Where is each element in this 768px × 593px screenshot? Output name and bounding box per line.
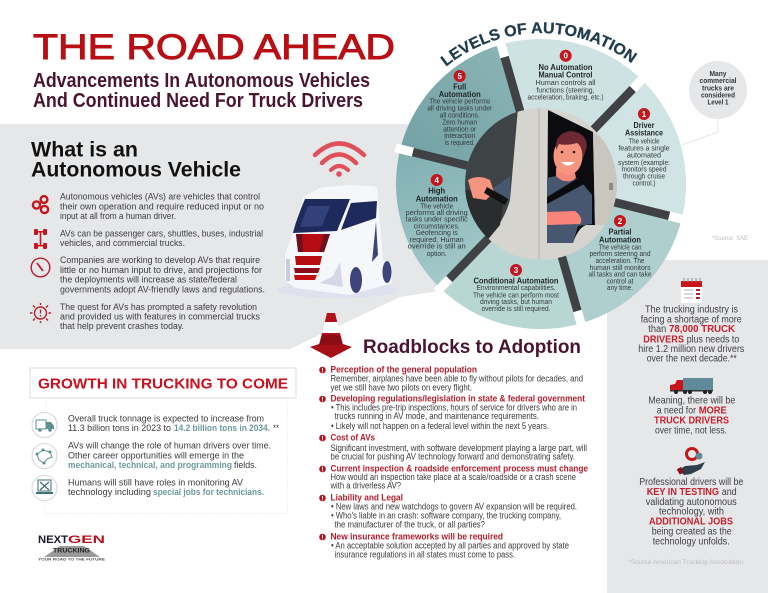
level 0	[528, 50, 604, 102]
text: technician roles: special jobs for technicians.	[153, 487, 264, 497]
text: driver shortage: 78,000 TRUCK	[669, 324, 735, 335]
text: AV development: little or no human input to drive, and projections for	[60, 265, 262, 275]
level 0: acceleration, braking, etc.)	[528, 94, 604, 102]
level 0: functions (steering,	[536, 88, 595, 94]
level 5: is required.	[445, 140, 475, 147]
text: need for more drivers	[648, 396, 736, 437]
level 1: Assistance	[625, 129, 664, 138]
source: American Trucking Association: *Source American Trucking Association	[628, 560, 743, 566]
level 5: attention or	[443, 126, 477, 133]
icon: gears	[33, 196, 48, 213]
level 1: system (example:	[618, 160, 670, 167]
roadblock: liability: the manufacturer of the truck, or all parties?	[334, 519, 485, 529]
level 4: High	[428, 187, 445, 196]
icon: network	[32, 444, 57, 468]
roadblock: insurance	[319, 530, 569, 559]
roadblock: inspection: with a driverless AV?	[330, 481, 401, 491]
logo: NextGen Trucking: TRUCKING	[53, 548, 90, 555]
level 1: control.)	[632, 180, 656, 187]
text: need for more drivers: Meaning, there will be	[648, 396, 736, 407]
heading: levels of automation: LEVELS OF AUTOMATION	[440, 22, 638, 66]
heading: roadblocks to adoption: Roadblocks to Adoption	[363, 337, 581, 358]
roadblock: inspection	[319, 462, 588, 491]
heading: growth in trucking to come: GROWTH IN TRUCKING TO COME	[38, 376, 288, 392]
level 4: override is still an	[408, 244, 466, 251]
level 0: Human controls all	[536, 80, 596, 87]
level 3: The vehicle can perform most	[473, 292, 559, 299]
level 3: Conditional Automation	[474, 276, 559, 285]
level 5: 5	[457, 72, 462, 81]
subtitle: And Continued Need For Truck Drivers	[33, 90, 363, 112]
roadblock: insurance: • An acceptable solution accepted by all parties and approved by state	[331, 541, 569, 551]
text: key in testing	[639, 477, 744, 548]
level 1: automated	[627, 153, 661, 160]
roadblock: regulations: • This includes pre-trip inspections, hours of service for drivers who are in	[331, 402, 577, 412]
callout: many commercial trucks are level 1: commercial	[700, 76, 736, 85]
roadblock: liability: • Who's liable in an crash: software company, the trucking company,	[331, 511, 561, 521]
level 2: Automation	[599, 235, 641, 244]
level 4: Geofencing is	[416, 230, 458, 237]
level 1: Driver	[634, 121, 654, 130]
text: driver shortage: facing a shortage of more	[641, 314, 742, 325]
text: safety revolution: that help prevent crashes today.	[60, 321, 184, 331]
level 3: driving tasks, but human	[480, 299, 552, 306]
text: technician roles	[68, 477, 264, 497]
wheel segments	[396, 39, 686, 329]
text: need for more drivers: a need for	[657, 405, 697, 416]
level 2	[588, 215, 652, 292]
level 4: Automation	[416, 194, 458, 203]
text: AV development: the deployments will increase as state/federal	[60, 275, 237, 285]
level 1	[618, 108, 670, 187]
heading: what is an autonomous vehicle: What is an	[31, 139, 138, 162]
text: human driver role: AVs will change the role of human drivers over time.	[68, 440, 271, 450]
level 4: circumstances.	[414, 224, 460, 230]
text: safety revolution: and provided us with features in commercial trucks	[60, 311, 260, 321]
text: AV development	[60, 255, 265, 295]
level 5: all driving tasks under	[427, 106, 493, 113]
level 2: Partial	[608, 228, 632, 237]
callout: many commercial trucks are level 1: trucks are	[702, 84, 734, 93]
text: AV development: Companies are working to develop AVs that require	[60, 255, 260, 265]
roadblock: insurance: New insurance frameworks will be required	[330, 530, 503, 541]
level 5	[427, 70, 493, 147]
text: technician roles: technology including	[68, 487, 151, 497]
level 4: performs all driving	[406, 210, 468, 217]
text: key in testing: technology unfolds.	[653, 537, 730, 548]
logo: NextGen Trucking: GEN	[68, 534, 105, 546]
heading: what is an autonomous vehicle: Autonomous Vehicle	[31, 159, 241, 182]
text: truck tonnage	[68, 413, 279, 433]
roadblock: cost: Significant investment, with software development playing a large part, will	[330, 443, 587, 453]
icon: traffic cone	[310, 313, 352, 358]
text: driver shortage: hire 1.2 million new drivers	[638, 344, 744, 355]
callout: many commercial trucks are level 1	[682, 61, 747, 145]
text: driver shortage: DRIVERS	[643, 334, 684, 345]
level 2: control at	[606, 278, 634, 285]
illustration: driver in truck cab	[465, 108, 617, 260]
roadblock: regulations: Developing regulations/legislation in state & federal government	[330, 393, 585, 404]
text: key in testing: and	[722, 487, 737, 498]
level 1: The vehicle	[628, 138, 660, 145]
icon: hand with gears	[677, 448, 705, 475]
panel: levels of automation wheel	[394, 22, 686, 329]
roadblock: regulations	[319, 393, 585, 431]
text: truck tonnage: **	[273, 423, 279, 433]
text: need for more drivers: TRUCK DRIVERS	[654, 416, 729, 427]
level 3: 3	[514, 266, 519, 275]
text: human driver role: mechanical, technical, and programming	[68, 460, 232, 470]
level 4	[406, 174, 468, 258]
text: need for more drivers: over time, not less.	[655, 426, 727, 437]
level 4: tasks under specific	[406, 217, 468, 224]
icon: axle	[34, 229, 47, 249]
level 4: 4	[434, 176, 439, 185]
callout: many commercial trucks are level 1: Many	[710, 69, 727, 78]
text: truck tonnage: Overall truck tonnage is expected to increase from	[68, 413, 264, 423]
text: driver shortage: The trucking industry is	[645, 304, 738, 315]
text: key in testing: validating autonomous	[646, 497, 737, 508]
icon: calendar	[681, 278, 702, 303]
text: human driver role: Other career opportunities will emerge in the	[68, 450, 244, 460]
text: truck tonnage: 14.2 billion tons in 2034.	[174, 423, 270, 433]
level 5: all conditions.	[440, 112, 480, 119]
callout: many commercial trucks are level 1: considered	[701, 91, 735, 100]
roadblock: liability	[319, 492, 577, 529]
level 5: Zero human	[442, 119, 477, 126]
text: human driver role	[68, 440, 271, 470]
subtitle: Advancements In Autonomous Vehicles	[33, 70, 370, 92]
icon: warning light	[30, 303, 51, 323]
text: safety revolution: The quest for AVs has prompted a safety revolution	[60, 302, 257, 312]
level 2: 2	[618, 217, 623, 226]
level 2: any time.	[607, 285, 633, 292]
text: AV types: AVs can be passenger cars, shuttles, buses, industrial	[60, 228, 263, 238]
roadblock: liability: Liability and Legal	[330, 492, 403, 503]
panel: growth in trucking	[30, 368, 296, 514]
level 2: human still monitors	[590, 265, 651, 272]
level 4: The vehicle	[420, 203, 453, 210]
logo: NextGen Trucking: YOUR ROAD TO THE FUTURE	[38, 557, 105, 562]
level 0: Manual Control	[538, 70, 592, 80]
text: AV development: governments adopt AV-friendly laws and regulations.	[60, 285, 265, 295]
roadblock: liability: • New laws and new watchdogs to govern AV expansion will be required.	[331, 501, 577, 511]
roadblock: regulations: trucks running in AV mode, and maintenance requirements.	[334, 411, 539, 421]
level 1: 1	[642, 110, 647, 119]
text: driver shortage: over the next decade.**	[647, 354, 737, 365]
roadblock: perception	[319, 364, 583, 392]
level 1: features a single	[618, 145, 670, 152]
subtitle	[33, 70, 370, 112]
level 3	[473, 264, 559, 313]
level 5: Automation	[439, 90, 481, 99]
text: key in testing: ADDITIONAL JOBS	[649, 517, 733, 528]
icon: laptop tools	[32, 476, 57, 500]
roadblock: cost: be crucial for pushing AV technology forward and demonstrating safety.	[330, 452, 575, 462]
callout: many commercial trucks are level 1: Level 1	[708, 98, 728, 107]
text: AV types	[60, 228, 263, 248]
level 4: required. Human	[410, 237, 464, 244]
level 5: The vehicle performs	[429, 99, 491, 106]
text: human driver role: fields.	[234, 460, 257, 470]
icon: semi truck	[670, 378, 713, 394]
source: SAE: *Source: SAE	[712, 236, 748, 242]
level 5: interaction	[444, 133, 475, 140]
roadblock: perception: Perception of the general population	[330, 364, 477, 375]
text: driver shortage	[638, 304, 744, 365]
text: truck tonnage: 11.3 billion tons in 2023 to	[68, 423, 171, 433]
level 3: Environmental capabilities.	[476, 285, 556, 292]
level 1: monitors speed	[622, 167, 667, 174]
level 0: 0	[563, 52, 568, 61]
text: key in testing: KEY IN TESTING	[647, 487, 719, 498]
level 2: acceleration. The	[596, 258, 645, 265]
roadblock: inspection: How would an inspection take place at a scale/roadside or a crash scene	[330, 472, 576, 482]
text: technician roles: Humans will still have roles in monitoring AV	[68, 477, 244, 487]
roadblock: cost	[319, 431, 587, 462]
background panel: what is an AV	[0, 124, 445, 349]
roadblock: perception: yet we still have two pilots on every flight.	[330, 382, 472, 392]
level 2: perform steering and	[590, 251, 651, 258]
icon: wifi signal	[315, 144, 364, 177]
level 1: through cruise	[623, 173, 665, 180]
level 4: option.	[427, 251, 447, 258]
logo: NextGen Trucking: NEXT	[38, 534, 68, 546]
roadblock: perception: Remember, airplanes have been able to fly without pilots for decades, and	[330, 374, 583, 384]
roadblock: cost: Cost of AVs	[330, 431, 375, 442]
text: AV definition	[60, 191, 264, 221]
level 0: No Automation	[538, 63, 593, 72]
text: AV definition: their own operation and require reduced input or no	[60, 201, 264, 211]
text: key in testing: Professional drivers will be	[639, 477, 744, 488]
text: key in testing: being created as the	[652, 527, 732, 538]
text: AV definition: input at all from a human driver.	[60, 211, 176, 221]
text: AV definition: Autonomous vehicles (AVs) are vehicles that control	[60, 191, 260, 201]
text: driver shortage: than	[648, 324, 666, 335]
level 5: Full	[453, 82, 466, 91]
level 2: The vehicle can	[598, 244, 642, 251]
text: safety revolution	[60, 302, 260, 331]
roadblock: inspection: Current inspection & roadside enforcement process must change	[330, 462, 588, 473]
roadblock: insurance: insurance regulations in all states must come to pass.	[334, 549, 515, 559]
text: need for more drivers: MORE	[699, 405, 727, 416]
icon: truck	[32, 412, 57, 438]
title: THE ROAD AHEAD	[33, 28, 395, 67]
roadblock: regulations: • Likely will not happen on a federal level within the next 5 years.	[331, 421, 549, 431]
illustration: autonomous truck	[277, 185, 399, 298]
heading: growth in trucking to come	[30, 368, 296, 398]
background panel: driver shortage	[607, 260, 768, 593]
level 2: all tasks and can take	[588, 272, 652, 279]
text: key in testing: technology, with	[659, 507, 724, 518]
icon: gauge	[31, 258, 50, 277]
logo: NextGen Trucking	[38, 534, 105, 562]
panel: driver shortage	[628, 278, 744, 566]
text: AV types: vehicles, and commercial trucks.	[60, 238, 185, 248]
heading: what is an autonomous vehicle	[31, 139, 241, 182]
text: driver shortage: plus needs to	[687, 334, 740, 345]
level 3: override is still required.	[482, 306, 551, 313]
